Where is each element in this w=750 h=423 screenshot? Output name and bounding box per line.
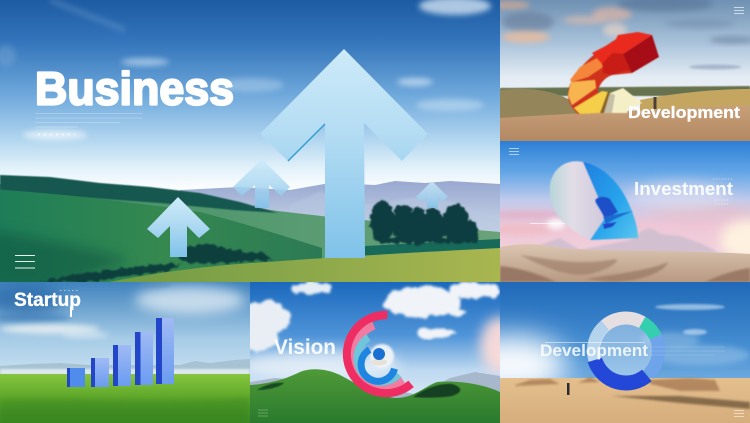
menu icon [15, 256, 35, 268]
large cloud [384, 281, 499, 318]
sun glow [457, 335, 567, 395]
clouds [0, 282, 245, 338]
left field [500, 88, 600, 118]
horizon haze [0, 369, 250, 375]
distant mountains [250, 372, 500, 400]
foreground wheat [500, 105, 750, 141]
label bar [545, 342, 645, 343]
yellow segment [574, 91, 608, 114]
pink ring [355, 326, 403, 385]
wispy clouds [640, 304, 750, 365]
ring inner glow [370, 344, 394, 368]
person [567, 383, 570, 395]
blue body [583, 162, 638, 240]
bar chart [67, 318, 174, 387]
distant mountains [540, 228, 718, 255]
hillside lower shade [0, 230, 123, 282]
right tree band [365, 239, 500, 256]
brown edge [600, 91, 610, 113]
green hills [250, 369, 500, 423]
bright orange top [570, 57, 603, 82]
right field [640, 89, 750, 110]
panel: Development desert ring [457, 282, 750, 423]
silver half [550, 161, 605, 240]
cream shaded facet [604, 93, 615, 113]
glass disc [599, 324, 653, 378]
green hillside [0, 190, 322, 282]
top cloud [292, 282, 332, 294]
bar 2 [91, 358, 109, 387]
pale segment [605, 318, 642, 326]
bar 4 [135, 332, 153, 385]
sky [500, 0, 750, 111]
red top face [592, 32, 652, 64]
dark blue segment [595, 360, 647, 383]
arrow far right [416, 181, 448, 208]
caption dots [38, 134, 75, 136]
horizon trees [500, 86, 750, 96]
sky [500, 282, 750, 423]
centre base [371, 358, 387, 366]
caption lines [650, 347, 725, 355]
panel: Development wheat field [490, 0, 750, 141]
long shadow [612, 396, 750, 409]
caption dots [60, 290, 79, 292]
label Vision: Vision [274, 336, 336, 359]
sky [0, 0, 500, 185]
dune shadows [515, 377, 720, 391]
sculpture [550, 161, 638, 240]
label Development: Development [540, 341, 648, 360]
foreground meadow [110, 248, 500, 282]
forest ridge [0, 175, 278, 213]
sky [0, 282, 250, 423]
panel: Business hero [0, 0, 500, 290]
mountain haze ridge [310, 193, 498, 232]
ring sculpture [593, 318, 659, 383]
dark red front face [623, 35, 659, 73]
grass shadows [0, 398, 250, 423]
pink streaks and glow [485, 181, 750, 260]
distant mountains [180, 181, 500, 232]
left cloud [238, 300, 290, 352]
sky [250, 282, 500, 423]
bar 5 [156, 318, 174, 384]
clouds [490, 0, 750, 70]
person [654, 97, 656, 109]
red ring [347, 315, 411, 393]
panel: Vision [238, 281, 520, 423]
caption lines [713, 179, 732, 204]
hill shadow left [257, 383, 284, 390]
concentric ring sculpture [347, 315, 411, 393]
arrow small front [147, 197, 210, 257]
clouds [0, 0, 491, 140]
centre ball [373, 348, 385, 360]
cream arrowhead [604, 88, 642, 113]
arrow mid [233, 159, 290, 208]
blue ring [361, 350, 394, 381]
arrow large [260, 49, 428, 258]
horizon mountains [0, 359, 250, 374]
panel: Startup [0, 282, 250, 423]
menu icon [734, 410, 744, 416]
label Development: Development [628, 104, 741, 122]
bushes [40, 244, 273, 282]
lower dark blob [603, 222, 617, 229]
haze [240, 351, 400, 379]
sand ground [500, 378, 750, 423]
panel: Investment desert [485, 141, 750, 282]
label Investment: Investment [634, 179, 733, 199]
teal segment [642, 322, 656, 337]
caption lines [35, 114, 143, 127]
far field [0, 184, 500, 264]
bar 3 [113, 345, 131, 386]
hill shadow right [413, 384, 460, 398]
dark backing arc [568, 38, 632, 114]
dune shadows [500, 255, 750, 282]
menu icon [734, 8, 744, 14]
sky [500, 141, 750, 282]
menu icon [258, 410, 268, 416]
3D curved arrow shape [568, 32, 659, 114]
pink glow [480, 317, 520, 373]
dark blue core [595, 197, 618, 219]
bar 1 [67, 368, 85, 387]
menu icon [509, 148, 519, 154]
label Startup: Startup [14, 290, 81, 311]
grass [0, 374, 250, 423]
light blue segment [649, 337, 659, 374]
dunes back [500, 244, 750, 282]
light orange segment [568, 80, 596, 105]
label stem [70, 306, 72, 317]
small cloud [416, 328, 456, 338]
tree cluster [370, 200, 479, 245]
arrow edge shadow [288, 124, 325, 161]
title Business: Business [35, 62, 234, 114]
blue band [603, 211, 633, 224]
red under segment [602, 53, 632, 75]
glass segment [593, 326, 605, 360]
light blue ring [357, 338, 399, 382]
